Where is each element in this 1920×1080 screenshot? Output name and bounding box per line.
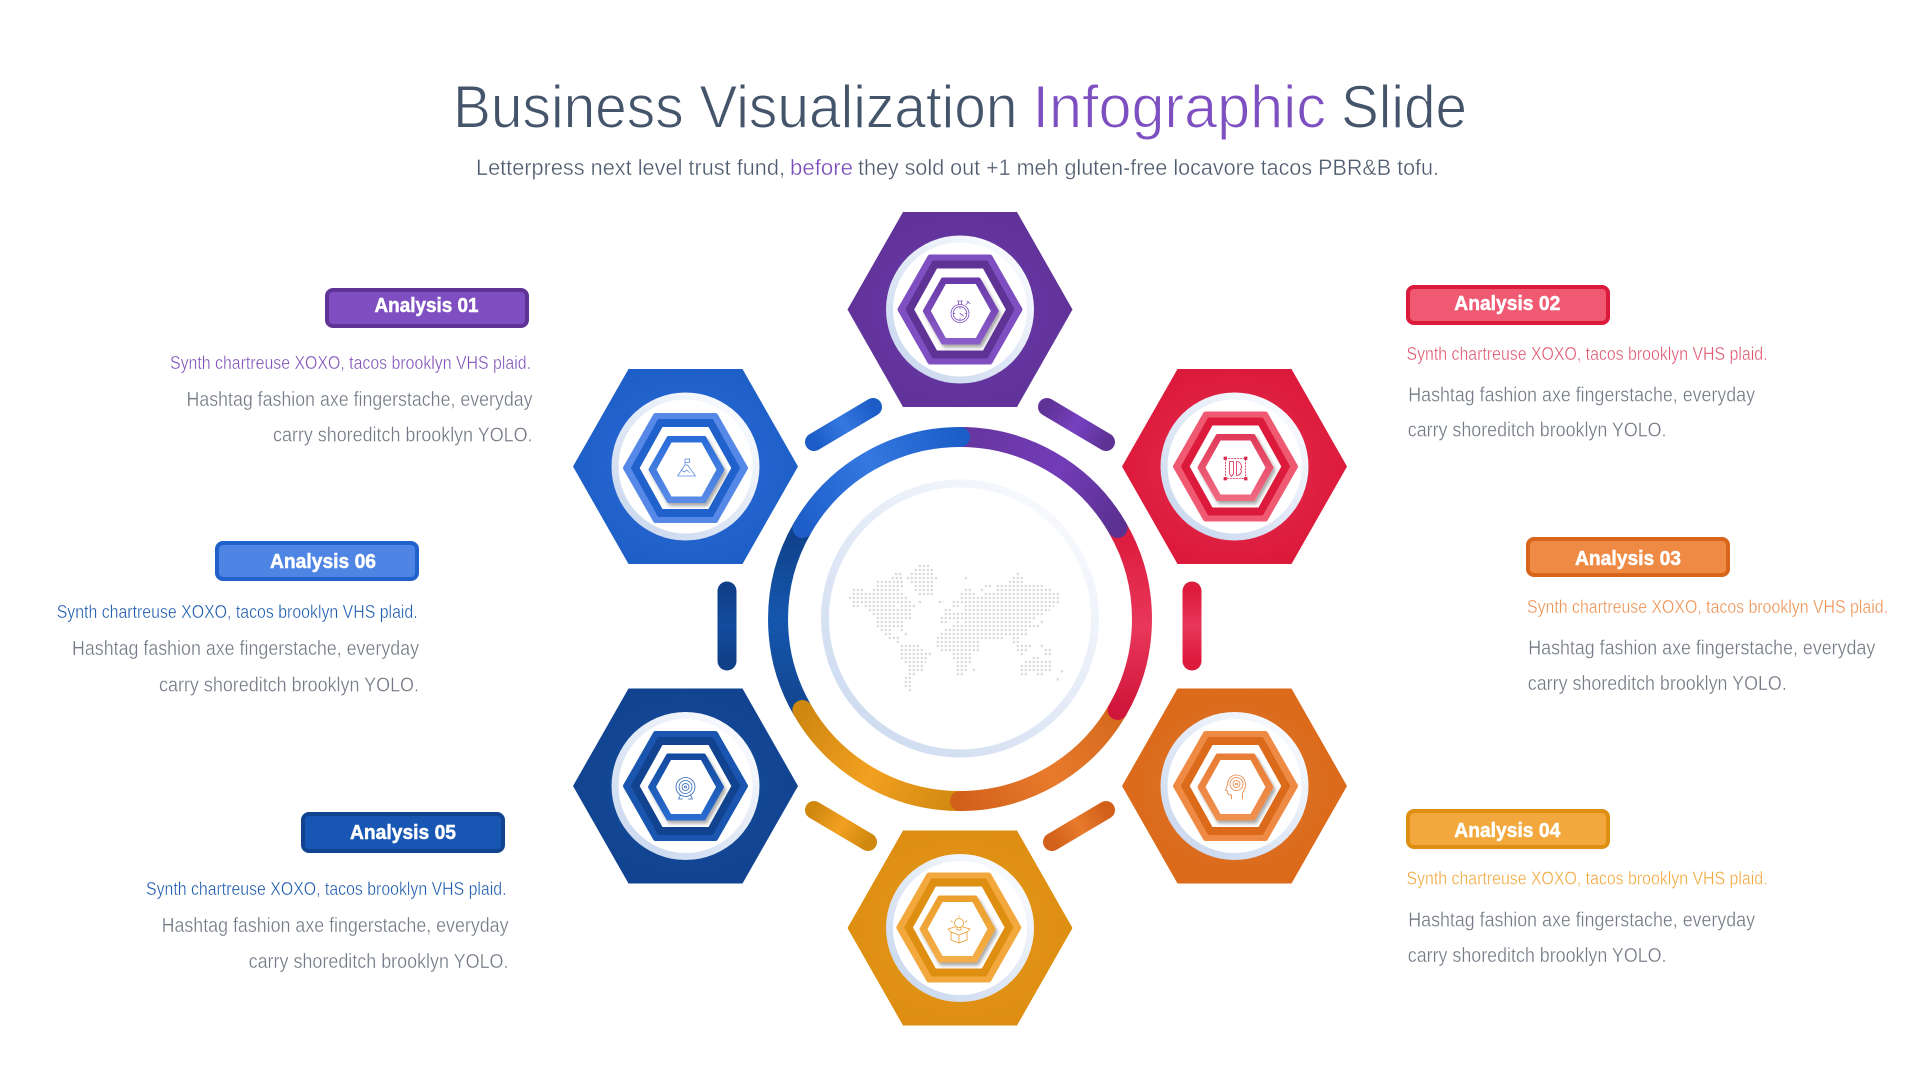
node: purple hexagon 01 — [848, 212, 1072, 407]
text: Hashtag fashion axe fingerstache, everyday — [1528, 638, 1875, 660]
icon: mountain flag — [678, 459, 696, 476]
badge — [217, 543, 417, 579]
text: Hashtag fashion axe fingerstache, everyday — [186, 389, 532, 411]
badge — [1408, 287, 1608, 323]
icon: target — [676, 778, 695, 799]
icon: box with bulb — [948, 916, 970, 943]
text — [146, 879, 508, 973]
connector: purple — [1047, 407, 1106, 442]
badge: Analysis 02 — [1454, 293, 1560, 315]
title: Infographic — [1032, 74, 1326, 140]
text: carry shoreditch brooklyn YOLO. — [159, 674, 419, 696]
badge: Analysis 06 — [270, 551, 376, 573]
text: carry shoreditch brooklyn YOLO. — [273, 425, 532, 447]
badge — [1528, 539, 1728, 575]
text — [1406, 868, 1768, 967]
dotted world map — [849, 566, 1063, 690]
badge — [1408, 811, 1608, 847]
connector: yellow — [814, 810, 868, 842]
icon: stopwatch — [951, 301, 970, 322]
text: Synth chartreuse XOXO, tacos brooklyn VHS plaid. — [57, 602, 418, 622]
node: dark blue hexagon 05 — [573, 688, 798, 884]
badge: Analysis 04 — [1454, 820, 1561, 842]
callout: Analysis 06 — [57, 543, 419, 696]
callout: Analysis 02 — [1406, 287, 1768, 442]
callout: Analysis 01 — [170, 290, 532, 447]
text — [1527, 597, 1888, 695]
text — [1406, 344, 1768, 442]
title: Slide — [1341, 74, 1467, 140]
callout: Analysis 05 — [146, 814, 508, 973]
badge — [303, 814, 503, 851]
text: Hashtag fashion axe fingerstache, everyday — [72, 638, 419, 660]
subtitle — [476, 155, 1439, 180]
badge: Analysis 05 — [350, 822, 456, 844]
text: Synth chartreuse XOXO, tacos brooklyn VHS plaid. — [1406, 868, 1768, 888]
text: carry shoreditch brooklyn YOLO. — [1408, 945, 1666, 967]
node: yellow hexagon 04 — [848, 830, 1072, 1026]
text: Hashtag fashion axe fingerstache, everyday — [1408, 910, 1755, 932]
subtitle: before — [790, 155, 853, 180]
subtitle: Letterpress next level trust fund, — [476, 155, 785, 180]
node: red hexagon 02 — [1122, 369, 1347, 564]
subtitle: they sold out +1 meh gluten-free locavore tacos PBR&B tofu. — [858, 155, 1439, 180]
callout: Analysis 03 — [1527, 539, 1888, 695]
text — [57, 602, 419, 696]
badge — [327, 290, 527, 326]
node: blue hexagon 06 — [573, 369, 798, 564]
central inner ring — [825, 484, 1095, 754]
node: orange hexagon 03 — [1122, 688, 1347, 884]
text: Hashtag fashion axe fingerstache, everyday — [1408, 385, 1755, 407]
text — [170, 353, 532, 447]
text: carry shoreditch brooklyn YOLO. — [249, 951, 508, 973]
connector: red — [1182, 591, 1202, 661]
icon: head maze — [1226, 775, 1246, 799]
callout: Analysis 04 — [1406, 811, 1768, 967]
connector: orange — [1052, 810, 1106, 842]
connector: dark blue — [718, 591, 736, 661]
text: Synth chartreuse XOXO, tacos brooklyn VHS plaid. — [146, 879, 506, 899]
text: carry shoreditch brooklyn YOLO. — [1528, 673, 1787, 695]
badge: Analysis 03 — [1575, 548, 1681, 570]
connector: blue — [814, 407, 873, 442]
title: Business Visualization — [453, 74, 1018, 140]
central ring: outer segments — [778, 437, 1142, 801]
title — [453, 74, 1467, 140]
text: Synth chartreuse XOXO, tacos brooklyn VHS plaid. — [1406, 344, 1768, 364]
badge: Analysis 01 — [374, 295, 478, 317]
text: Hashtag fashion axe fingerstache, everyday — [162, 915, 508, 937]
icon: design pencil — [1224, 457, 1247, 480]
text: carry shoreditch brooklyn YOLO. — [1408, 420, 1666, 442]
text: Synth chartreuse XOXO, tacos brooklyn VHS plaid. — [170, 353, 531, 373]
